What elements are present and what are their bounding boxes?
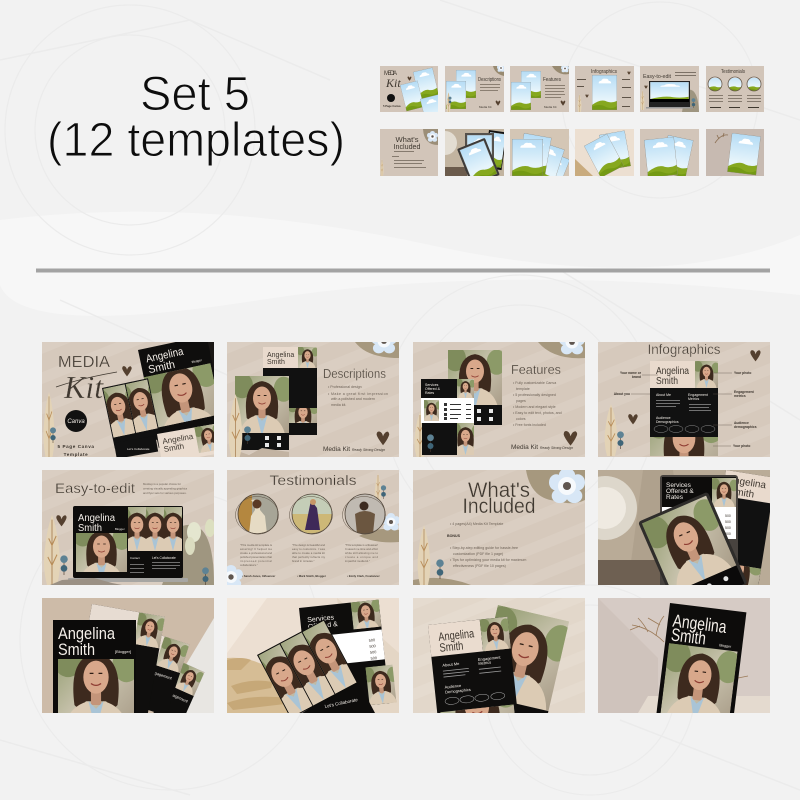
labels: metrics [734,394,746,398]
back flyer: 500 [370,656,377,661]
dried branch [630,616,748,678]
testimonial text 3: while still allowing me to [345,551,378,555]
flyer: About Me [656,393,671,397]
labels: Your photo [734,371,751,375]
portrait circle 2 [290,494,333,534]
front flyer: Let's Collaborate [324,697,359,709]
pampas grass [227,658,293,713]
front flyer: Angelina [438,626,475,644]
mid tablet: Offered & [666,488,694,495]
front flyer [231,373,294,457]
bullet list: • Free fonts included [513,423,546,427]
includes list: BONUS [447,534,461,538]
flyer front: services: Rates [425,391,434,395]
bullet list [513,381,562,427]
laptop: Smith [78,523,102,534]
thumbnail: media kit: Kit [385,76,401,90]
mid tablet [660,475,738,590]
front tablet [636,491,750,614]
front flyer: Audience [444,683,462,690]
includes list [447,522,526,568]
flyer: Demographics [656,420,679,424]
thumbnail: two cards [640,129,699,176]
flyer [645,361,724,486]
plant [44,515,68,585]
blob and flower [538,329,585,358]
testimonial text 2: brand in minutes." [292,559,314,563]
flyer stack: Angelina [145,346,185,365]
bullet list: • Professional design [328,385,362,389]
blob and flower [526,468,585,503]
back flyer: 500 [369,644,376,649]
back flyer: Smith [728,486,755,501]
mid tablet: 500 [725,514,731,518]
title [47,68,345,167]
bullet list: pages [516,399,526,403]
back flyer [299,596,402,711]
testimonial text 3: impactful media kit." [345,559,370,563]
heading: Descriptions [323,366,386,381]
flyer stack: Smith [163,442,185,454]
heading: Features [511,362,561,377]
flyer: Angelina [672,611,728,637]
testimonial text 2: "The design is beautiful and [292,543,325,547]
plant [605,404,624,456]
bullet list: media kit. [331,403,346,407]
intro text [143,482,188,495]
front flyer [426,616,525,762]
includes list: • Tips for optimizing your media kit for maximum [450,558,526,562]
laptop: Angelina [78,513,115,524]
fanned flyers: Engagement [149,669,173,681]
testimonial text 1: impressed potential [240,559,272,563]
thumbnail: easy to edit [640,66,699,112]
panel: testimonials [227,470,399,585]
portrait circle 3 [342,494,387,534]
title: (12 templates) [47,114,345,167]
icon: heart [56,515,67,526]
flyer: Angelina [656,366,689,377]
flyer front: services: Services [425,383,439,387]
testimonial text 1: collaborators." [240,563,258,567]
laptop: Blogger [115,527,125,531]
icon: canva badge [65,410,87,432]
intro text: creating visually appealing graphics [143,486,188,490]
thumbnail: fanned cards [510,129,569,176]
labels: demographics [734,425,757,429]
flyer back [444,346,506,425]
testimonial text 3: create a unique and [345,555,378,559]
flyer stack: Blogger [191,358,202,364]
includes list: • Step-by-step editing guide for hassle-free [450,546,518,550]
flyer stack: Let's Collaborate [127,447,150,451]
plant and flowers [219,473,400,588]
thumbnail: features: Media Kit [544,105,557,109]
panel: infographics [598,341,770,457]
bullet list: template [516,387,530,391]
panel: easy to edit [42,470,214,585]
footer: Media Kit Ready Strong Design [323,446,385,453]
blob and leaves [162,519,215,585]
front flyer: About Me [442,661,460,668]
labels: brand [632,375,641,379]
icon: canva badge: Canva [67,419,85,425]
bullet list: • Fully customizable Canva [513,381,556,385]
mid tablet: 500 [725,526,731,530]
thumbnail: descriptions: Media Kit [479,105,492,109]
mid tablet: Services [666,482,692,489]
flyer: Metrics [688,397,700,401]
thumbnail: tablets [445,129,504,176]
testimonial text 1: • Sarah Jones, Influencer [242,574,276,578]
labels: Your photo [733,444,750,448]
blob and flower [355,328,399,358]
testimonial text 1: amazing! It helped me [240,547,272,551]
laptop: Contact [130,556,140,560]
flyer: Smith [656,376,678,387]
panel: features [413,342,585,457]
testimonial text 1: create a professional and [240,551,272,555]
testimonial text 2: easy to customize. I was [292,547,326,551]
panel: services mockup [227,598,399,713]
bullet list: • 5 professionally designed [513,393,556,397]
mid tablet: 500 [725,532,731,536]
back flyer: Angelina [267,352,294,359]
panel: what's included [413,470,585,585]
labels: Your name or [620,371,642,375]
testimonial text 1: polished presentation that [240,555,272,559]
flyer: Engagement [688,393,708,397]
thumbnail: testimonials [706,66,764,112]
plant [229,394,251,457]
thumbnail: descriptions: Descriptions [478,77,501,83]
thumbnail: media kit: MEDIA [384,71,397,77]
front flyer [238,609,377,728]
testimonial text 3: It saved me time and effort [345,547,378,551]
testimonial text 3: • Emily Clark, Freelancer [347,574,381,578]
bullet list: • Modern and elegant style [513,405,556,409]
labels: Engagement [734,390,755,394]
panel: tablet mockup [598,470,770,585]
back flyer [465,603,578,733]
flyer: Audience [656,416,671,420]
front flyer: [Blogger] [115,649,131,654]
front flyer: Metrics [478,660,491,666]
footer: Media Kit Ready Strong Design [511,444,573,451]
laptop: Let's Collaborate [152,556,176,560]
thumbnail: what's included: What's [396,135,419,144]
mid tablet: 500 [725,520,731,524]
thumbnail: media kit: 5 Page Canva [383,104,401,108]
back flyer: 500 [369,638,375,643]
icon: heart [122,366,132,376]
thumbnail: single card [706,129,764,176]
heading: media kit: MEDIA [58,354,110,371]
plant [414,412,426,457]
back flyer: Angelina [727,474,767,491]
title: Set 5 [140,68,250,121]
intro text: and flyer sets for various purposes. [143,491,187,495]
thumbnail: media kit [380,66,438,112]
testimonial text 2: able to create a media kit [292,551,325,555]
icon: blue bud [202,567,209,585]
includes list: • 4 pages(A4) Media Kit Template [450,522,503,526]
testimonial text 2: • Mark Smith, Blogger [297,574,327,578]
bullet list: colors [516,417,526,421]
thumbnail: infographics: Infographics [591,69,617,75]
testimonial text 3: "This template is a lifesaver! [345,543,378,547]
front flyer: Engagement [478,655,502,662]
icon: heart [377,431,389,445]
back flyer: 500 [370,650,377,655]
testimonial text 2 [292,543,327,578]
plant [413,525,471,585]
heading [462,479,536,518]
flyer stack [90,335,245,464]
caption: Template [64,452,88,457]
thumbnail: infographics [575,66,634,112]
bullet list: with a polished and modern [331,397,375,401]
back flyer [263,346,319,435]
testimonial text 1 [240,543,276,578]
panel: descriptions [227,342,399,457]
flyer [655,603,748,728]
includes list: customization (PDF file 1 page) [453,552,503,556]
thumbnail: what's included [380,129,438,176]
front flyer: Smith [439,638,464,655]
torn paper [50,578,122,585]
flyer front: services: Offered & [425,387,441,391]
thumbnail: features [510,66,569,112]
thumbnail: what's included: Included [394,142,420,151]
thumbnail: features: Features [543,77,561,83]
icon: heart top [750,350,761,361]
bullet list: • Make a great first impression [328,392,388,396]
flyer front: services [421,379,482,455]
plant [43,392,56,457]
heading: Testimonials [270,472,356,488]
flyer stack: Smith [147,359,176,376]
panel: flyer fan mockup [42,598,214,713]
thumbnail: easy to edit: Easy-to-edit [643,74,672,80]
front flyer: Angelina [58,624,115,643]
front flyer [53,620,140,730]
labels: About you [614,392,630,396]
icon: heart lower [628,414,638,424]
testimonial text 2: that perfectly reflects my [292,555,326,559]
heading: media kit: Kit [63,369,104,405]
caption [57,444,95,457]
labels [614,371,757,448]
heading: Included [462,495,536,518]
flyer: Smith [670,624,707,649]
flyer stack: Angelina [162,432,194,446]
heading: What's [468,479,530,502]
back flyer: Offered & [308,621,338,631]
thumbnail: two rotated cards [575,129,634,176]
includes list: effectiveness (PDF file 10 pages) [453,564,506,568]
blob [359,529,399,542]
back flyer [702,469,779,608]
icon: heart [564,431,577,446]
back flyer: Services [307,614,335,624]
caption: 5 Page Canva [57,444,95,449]
flyer: Blogger [719,643,732,649]
thumbnail: descriptions [445,66,504,112]
heading: Infographics [648,341,720,357]
fanned flyers: Engagement [166,690,190,704]
divider [36,268,770,272]
testimonial text 1: "This media kit template is [240,543,273,547]
testimonial text 3 [345,543,381,578]
panel: single flyer mockup [598,598,770,713]
labels: Audience [734,421,749,425]
bullet list [328,385,388,407]
panel: two-sided flyer mockup [413,598,585,713]
front flyer: Smith [58,640,95,659]
panel: media kit cover [42,342,214,457]
back flyer: Sponsored [309,639,331,646]
heading: Easy-to-edit [55,480,135,496]
front flyer: Demographics [445,687,471,695]
heading: media kit [56,354,117,405]
fanned flyers [73,604,206,730]
portrait circle 1 [236,494,279,534]
back flyer: Smith [267,359,285,366]
mid tablet: Rates [666,494,684,501]
thumbnail: testimonials: Testimonials [721,69,745,75]
bullet list: • Easy to edit text, photos, and [513,411,562,415]
intro text: Mockup is a popular choice for [143,482,181,486]
laptop [68,506,195,582]
